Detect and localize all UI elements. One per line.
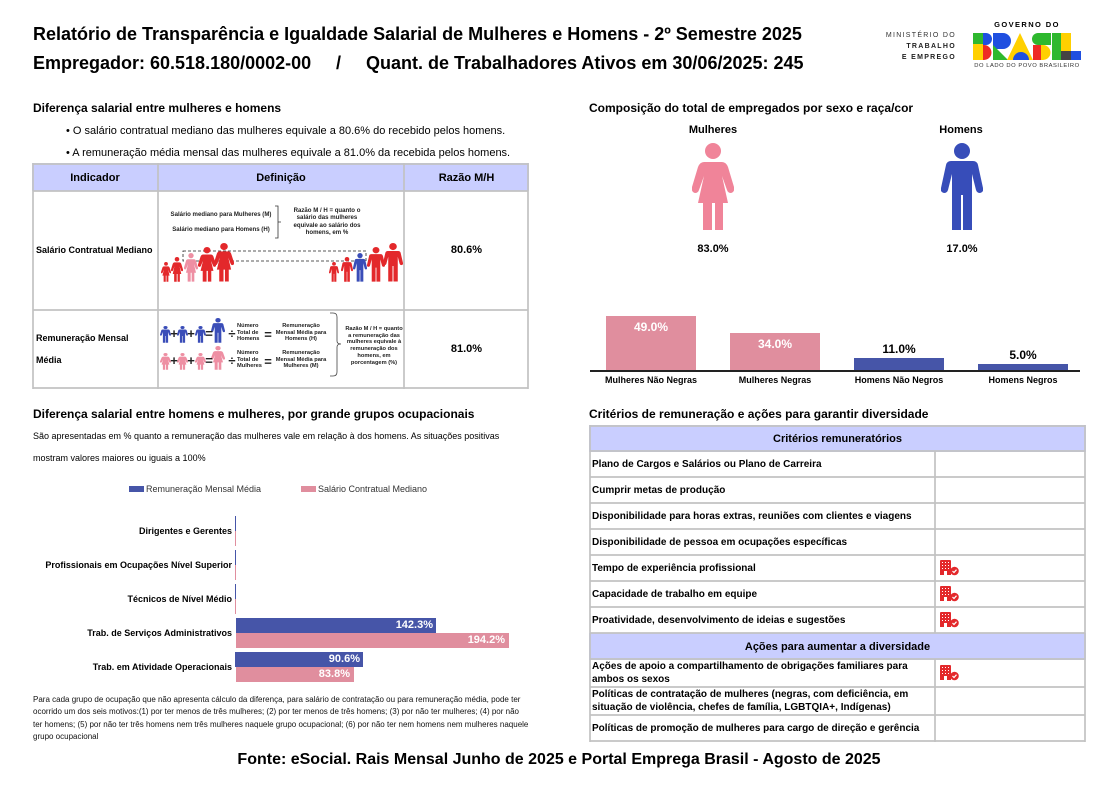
- diagram: remuneração média: a remuneração das: [348, 333, 400, 339]
- text block: bullets: [66, 125, 510, 159]
- header: critérios remuneratórios: Critérios remuneratórios: [773, 433, 902, 445]
- bar: mulheres não negras: [606, 316, 696, 371]
- row: proatividade: [589, 607, 936, 634]
- header: ações diversidade: [589, 633, 1086, 660]
- diagram: salário mediano: Salário mediano para Mulheres (M): [171, 211, 271, 218]
- panel: indicator table: [32, 163, 529, 389]
- text block: bullets: • A remuneração média mensal das mulheres equivale a 81.0% da recebida pelos homens.: [66, 147, 510, 159]
- row: promoção: Políticas de promoção de mulheres para cargo de direção e gerência: [592, 723, 919, 734]
- diagram: salário mediano: homens, em %: [306, 229, 348, 236]
- value: 80.6%: 80.6%: [451, 244, 482, 256]
- labels: categorias: Homens Não Negros: [855, 375, 943, 385]
- header: ações diversidade: Ações para aumentar a diversidade: [745, 641, 930, 653]
- diagram: remuneração média: homens, em: [357, 353, 391, 359]
- row label: salário contratual: Salário Contratual Mediano: [36, 245, 153, 255]
- diagram: remuneração média: ÷: [228, 326, 236, 341]
- figure: mulheres: 83.0%: [697, 243, 729, 255]
- title: Quant. de Trabalhadores Ativos em 30/06/2025: 245: [366, 53, 804, 73]
- diagram: salário mediano: Salário mediano para Homens (H): [172, 226, 270, 233]
- heading: critérios: Critérios de remuneração e ações para garantir diversidade: [589, 407, 928, 421]
- diagram: remuneração média: Mulheres (M): [283, 363, 319, 369]
- row label: remuneração: [32, 309, 158, 389]
- bar: operacionais remuneração: [235, 652, 363, 667]
- diagram: remuneração média: Número: [237, 323, 258, 329]
- bar: serviços remuneração: [236, 618, 436, 633]
- labels: categorias: Mulheres Não Negras: [605, 375, 697, 385]
- diagram: remuneração média: Total de: [237, 330, 258, 336]
- diagram: remuneração média: Homens: [237, 336, 259, 342]
- logo: ministério do trabalho e emprego: [886, 30, 956, 61]
- diagram: remuneração média: +: [187, 353, 195, 368]
- diagram: remuneração média: =: [264, 354, 272, 369]
- row: plano de cargos: Plano de Cargos e Salários ou Plano de Carreira: [592, 459, 822, 470]
- text block: bullets: • O salário contratual mediano das mulheres equivale a 80.6% do recebido pelos homens.: [66, 125, 505, 137]
- source footer: Fonte: eSocial. Rais Mensal Junho de 2025 e Portal Emprega Brasil - Agosto de 2025: [237, 751, 881, 768]
- heading: composição: Composição do total de empregados por sexo e raça/cor: [589, 101, 913, 115]
- icon: empresa obrigações: [940, 665, 959, 680]
- row: obrigações familiares: Ações de apoio a compartilhamento de obrigações familiares para: [592, 661, 908, 672]
- bar: serviços remuneração: 142.3%: [396, 619, 433, 631]
- row: proatividade: Proatividade, desenvolvimento de ideias e sugestões: [592, 615, 845, 626]
- panel: critérios table: [589, 425, 1086, 742]
- labels: ocupações: Dirigentes e Gerentes: [139, 526, 232, 536]
- diagram: remuneração média: Mensal Média para: [276, 330, 326, 336]
- text block: nota de rodapé: ter homens; (5) por não ter três homens nem três mulheres naquele grupo ocupacional; (6) por não ter nem homens nem mulheres naquele: [33, 720, 528, 729]
- labels: categorias: Homens Negros: [988, 375, 1058, 385]
- diagram: remuneração média: Remuneração: [282, 350, 320, 356]
- row: metas: Cumprir metas de produção: [592, 485, 725, 496]
- labels: ocupações: Trab. em Atividade Operacionais: [93, 662, 232, 672]
- logo: governo do brasil: GOVERNO DO: [994, 20, 1060, 29]
- diagram: remuneração média: Razão M / H = quanto: [345, 326, 403, 332]
- legend: Salário Contratual Mediano: [318, 484, 427, 494]
- diagram: remuneração média: Mensal Média para: [276, 357, 326, 363]
- diagram: remuneração média: Homens (H): [285, 336, 317, 342]
- logo: ministério do trabalho e emprego: E EMPREGO: [902, 54, 956, 61]
- labels: ocupações: Trab. de Serviços Administrativos: [87, 628, 232, 638]
- text block: explicação: mostram valores maiores ou iguais a 100%: [33, 453, 206, 463]
- figure: homens: 17.0%: [946, 243, 978, 255]
- bar: mulheres negras: [730, 333, 820, 371]
- diagram: salário mediano: equivale ao salário dos: [293, 222, 361, 229]
- row label: salário contratual: [32, 190, 158, 310]
- diagram: remuneração média: porcentagem (%): [351, 360, 397, 366]
- title: Relatório de Transparência e Igualdade Salarial de Mulheres e Homens - 2º Semestre 2025: [33, 24, 802, 44]
- diagram: remuneração média: Mulheres: [237, 363, 262, 369]
- diagram: remuneração média: =: [264, 327, 272, 342]
- title: [33, 24, 804, 73]
- bar chart: grupos ocupacionais: [45, 516, 509, 682]
- header: definição: [157, 163, 405, 191]
- figure: homens: [939, 124, 983, 255]
- row label: remuneração: Remuneração Mensal Média: [36, 333, 129, 365]
- row: horas extras: Disponibilidade para horas extras, reuniões com clientes e viagens: [592, 511, 912, 522]
- logo: governo do brasil: DO LADO DO POVO BRASILEIRO: [974, 63, 1080, 69]
- icon: empresa capacidade: [940, 586, 959, 602]
- diagram: remuneração média: remuneração dos: [350, 346, 398, 352]
- header: indicador: Indicador: [70, 172, 120, 184]
- header: razão: Razão M/H: [439, 172, 494, 184]
- value: 81.0%: [404, 309, 529, 389]
- row: ocupações específicas: [589, 529, 936, 556]
- text block: explicação: São apresentadas em % quanto a remuneração das mulheres vale em relação à dos homens. As situações positivas: [33, 431, 499, 441]
- text block: nota de rodapé: grupo ocupacional: [33, 732, 98, 741]
- bar: homens não negros: [854, 358, 944, 371]
- text block: nota de rodapé: Para cada grupo de ocupação que não apresenta cálculo da diferença, para salário de contratação ou para remuneração média, pode ter: [33, 695, 520, 704]
- diagram: remuneração média: Total de: [237, 357, 258, 363]
- figure: mulheres: [689, 124, 737, 255]
- value: 81.0%: 81.0%: [451, 343, 482, 355]
- logo: ministério do trabalho e emprego: MINISTÉRIO DO: [886, 32, 956, 39]
- logo: ministério do trabalho e emprego: TRABALHO: [906, 43, 956, 50]
- icon: empresa proatividade: [940, 612, 959, 628]
- diagram: remuneração média: Número: [237, 350, 258, 356]
- row: políticas de contratação: Políticas de contratação de mulheres (negras, com deficiência, em: [592, 689, 908, 700]
- bar: operacionais salário: [236, 667, 354, 682]
- row: tempo de experiência: Tempo de experiência profissional: [592, 563, 756, 574]
- bar: operacionais salário: 83.8%: [319, 668, 350, 680]
- text block: explicação: [33, 431, 499, 463]
- header: critérios remuneratórios: [589, 425, 1086, 452]
- labels: ocupações: [45, 526, 232, 672]
- bar: mulheres negras: 34.0%: [758, 337, 792, 351]
- diagram: remuneração média: [160, 312, 403, 376]
- axis lines: [235, 516, 236, 614]
- bar: homens negros: [978, 364, 1068, 371]
- header: razão: [404, 163, 529, 191]
- row: obrigações familiares: [589, 659, 936, 688]
- row: obrigações familiares: ambos os sexos: [592, 674, 670, 684]
- title: Empregador: 60.518.180/0002-00: [33, 53, 311, 73]
- row: plano de cargos: [589, 451, 936, 478]
- bar: operacionais remuneração: 90.6%: [329, 653, 360, 665]
- diagram: remuneração média: ÷: [228, 353, 236, 368]
- row: tempo de experiência: [589, 555, 936, 582]
- diagram: remuneração média: +: [170, 353, 178, 368]
- figure: homens: Homens: [939, 124, 983, 136]
- bar: serviços salário: 194.2%: [468, 634, 505, 646]
- header: definição: Definição: [256, 172, 306, 184]
- logo: governo do brasil: [973, 20, 1081, 69]
- row: metas: [589, 477, 936, 504]
- diagram: salário mediano: salário das mulheres: [297, 214, 357, 221]
- legend: [129, 484, 427, 494]
- labels: ocupações: Profissionais em Ocupações Nível Superior: [45, 560, 232, 570]
- diagram: remuneração média: =: [205, 326, 213, 341]
- heading: grupos ocupacionais: Diferença salarial entre homens e mulheres, por grande grupos ocupacionais: [33, 407, 474, 421]
- row: capacidade: Capacidade de trabalho em equipe: [592, 589, 757, 600]
- diagram: remuneração média: =: [205, 353, 213, 368]
- bar: serviços salário: [236, 633, 509, 648]
- labels: categorias: [605, 375, 1058, 385]
- row: políticas de contratação: situação de violência, chefes de família, LGBTQIA+, Indígenas): [592, 702, 891, 712]
- diagram: salário mediano: [161, 206, 403, 282]
- figure: mulheres: Mulheres: [689, 124, 737, 136]
- row: ocupações específicas: Disponibilidade de pessoa em ocupações específicas: [592, 537, 847, 548]
- diagram: remuneração média: mulheres equivale à: [347, 339, 401, 345]
- row: políticas de contratação: [589, 687, 936, 716]
- bar chart: raça e sexo: [590, 316, 1080, 385]
- heading: diferença salarial: Diferença salarial entre mulheres e homens: [33, 101, 281, 115]
- diagram: remuneração média: +: [187, 326, 195, 341]
- text block: nota de rodapé: ocorrido um dos seis motivos:(1) por ter menos de três mulheres; (2) por ter menos de três homens; (3) por não ter mulheres; (4) por não: [33, 707, 519, 716]
- axis: [590, 370, 1080, 372]
- diagram: salário mediano: Razão M / H = quanto o: [294, 207, 360, 214]
- row: capacidade: [589, 581, 936, 608]
- diagram: remuneração média: Remuneração: [282, 323, 320, 329]
- row: horas extras: [589, 503, 936, 530]
- icon: empresa tempo de experiência: [940, 560, 959, 576]
- bar: mulheres não negras: 49.0%: [634, 320, 668, 334]
- title: /: [336, 53, 341, 73]
- legend: Remuneração Mensal Média: [146, 484, 261, 494]
- labels: categorias: Mulheres Negras: [739, 375, 811, 385]
- bar chart: raça e sexo: 11.0%: [882, 342, 916, 356]
- diagram: remuneração média: +: [170, 326, 178, 341]
- text block: nota de rodapé: [33, 695, 528, 741]
- header: indicador: [32, 163, 158, 191]
- row: promoção: [589, 715, 936, 742]
- bar chart: raça e sexo: 5.0%: [1009, 348, 1037, 362]
- value: 80.6%: [404, 190, 529, 310]
- labels: ocupações: Técnicos de Nível Médio: [127, 594, 232, 604]
